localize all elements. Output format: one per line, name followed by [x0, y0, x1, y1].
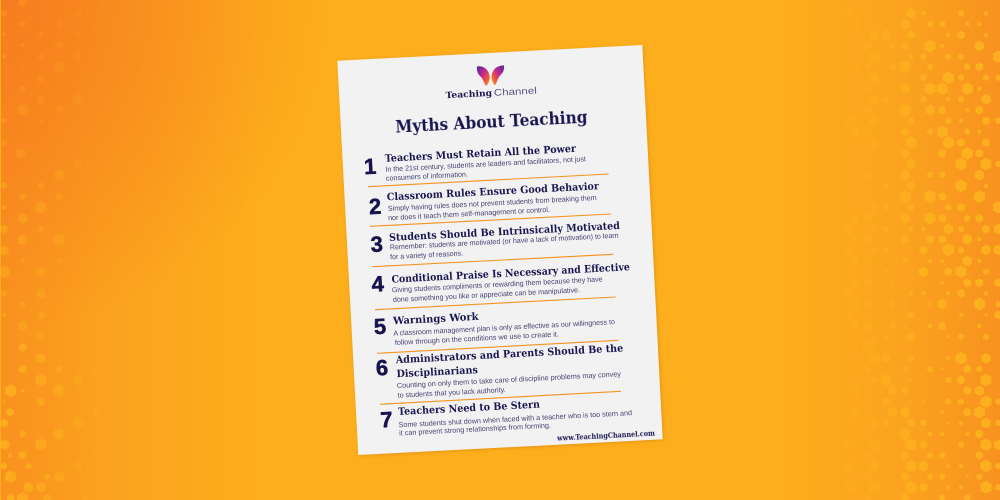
logo wordmark: Teaching — [445, 89, 492, 101]
myth 2 — [368, 180, 611, 226]
heading 3: Students Should Be Intrinsically Motivated — [389, 220, 620, 244]
number 3: 3 — [370, 231, 383, 257]
description 4 — [392, 274, 603, 304]
number 2: 2 — [368, 194, 382, 219]
description 3: Remember: students are motivated (or have a lack of motivation) to learn — [390, 231, 619, 252]
description 6: Counting on only them to take care of discipline problems may convey — [397, 369, 621, 390]
description 2: Simply having rules does not prevent students from breaking them — [388, 193, 597, 213]
heading 6: Disciplinarians — [396, 364, 478, 380]
description 3 — [390, 231, 619, 261]
number 4: 4 — [371, 271, 385, 297]
poster paper — [337, 45, 663, 455]
website footer: www.TeachingChannel.com — [556, 429, 656, 443]
description 5: follow through on the conditions we use to create it. — [395, 329, 559, 347]
description 3: for a variety of reasons. — [390, 248, 463, 261]
logo: Teaching Channel — [445, 65, 537, 101]
myth 6 — [375, 342, 624, 404]
heading 6: Administrators and Parents Should Be the — [395, 342, 624, 366]
description 1: consumers of information. — [386, 169, 468, 183]
number 1: 1 — [363, 154, 377, 179]
heading 7: Teachers Need to Be Stern — [398, 399, 541, 418]
logo wordmark: Channel — [494, 85, 537, 98]
description 1 — [385, 154, 586, 183]
description 7: it can prevent strong relationships from forming. — [399, 421, 551, 437]
myth 7 — [380, 399, 632, 437]
heading 4: Conditional Praise Is Necessary and Effective — [391, 261, 631, 286]
description 5: A classroom management plan is only as effective as our willingness to — [393, 317, 615, 338]
number 5: 5 — [373, 314, 387, 339]
description 6 — [397, 369, 621, 400]
description 5 — [393, 317, 615, 347]
number 6: 6 — [375, 355, 389, 380]
description 7: Some students shut down when faced with a teacher who is too stern and — [398, 408, 632, 429]
heading 2: Classroom Rules Ensure Good Behavior — [387, 180, 600, 203]
hexagon pattern: left side — [1, 0, 64, 500]
heading 6 — [395, 342, 624, 380]
logo wordmark — [445, 85, 537, 101]
myth 1 — [363, 143, 609, 187]
number 7: 7 — [380, 407, 393, 432]
myth 5 — [373, 311, 618, 353]
description 4: Giving students compliments or rewarding them because they have — [392, 274, 603, 294]
description 2 — [388, 193, 597, 222]
panel: tilted poster sheet — [337, 45, 663, 455]
icon: butterfly — [477, 65, 504, 86]
description 1: In the 21st century, students are leaders and facilitators, not just — [385, 154, 586, 174]
description 2: nor does it teach them self-management or control. — [388, 205, 550, 222]
myth 3 — [370, 220, 620, 267]
heading 1: Teachers Must Retain All the Power — [385, 143, 577, 165]
description 4: done something you like or appreciate can be manipulative. — [393, 285, 580, 304]
myth 4 — [371, 261, 631, 310]
heading 5: Warnings Work — [392, 311, 480, 327]
title: Myths About Teaching — [395, 108, 588, 137]
hexagon pattern: right side — [891, 8, 1000, 500]
description 6: to students that you lack authority. — [397, 385, 506, 400]
